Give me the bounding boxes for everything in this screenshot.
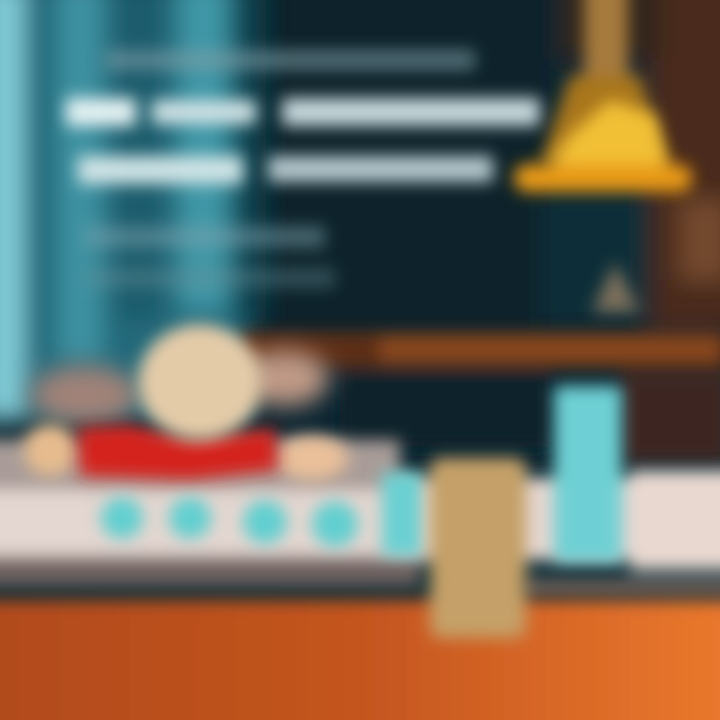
panel: white table	[0, 440, 720, 594]
panel: orange floor	[0, 600, 720, 720]
sub text line 2	[85, 268, 335, 288]
panel: teal curtain	[0, 0, 266, 420]
character head	[138, 324, 262, 440]
background: dark wall	[0, 0, 720, 470]
character hands	[24, 424, 348, 480]
heading text lines	[66, 50, 540, 288]
faint top line	[105, 50, 475, 70]
shelf	[240, 332, 720, 462]
icon: brass lamp	[514, 0, 692, 192]
row of teal dots	[101, 472, 422, 556]
illustration: character	[24, 324, 348, 480]
icon: small lamp base	[592, 262, 640, 312]
tan cylinder	[430, 458, 526, 638]
headline line 1	[66, 98, 540, 126]
headline line 2	[78, 156, 493, 184]
sub text line 1	[85, 226, 325, 248]
character wings	[30, 350, 329, 425]
character body	[78, 425, 278, 480]
teal bar	[554, 386, 622, 562]
